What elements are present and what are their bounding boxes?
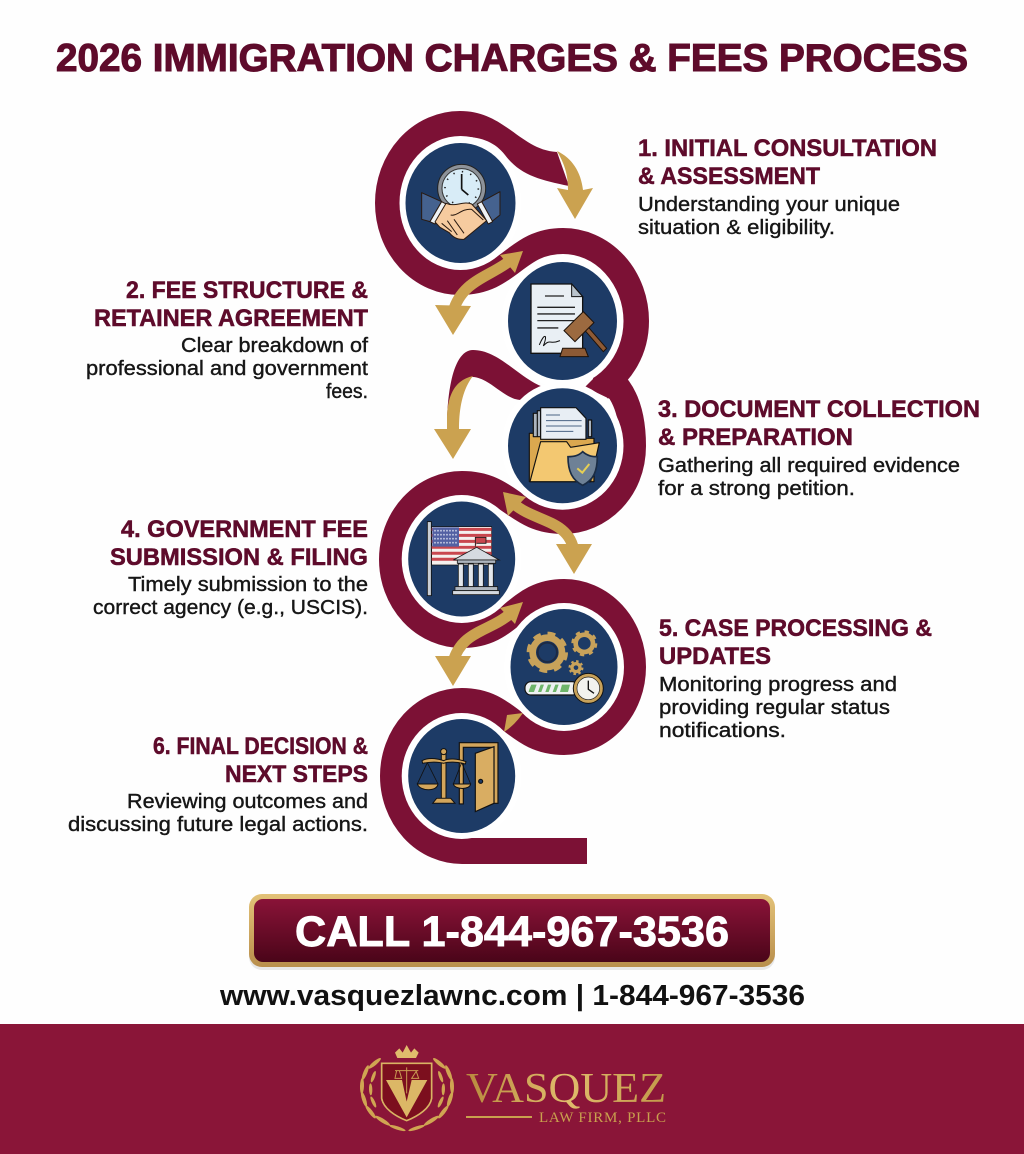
icon circle 1: handshake and clock (400, 136, 522, 270)
step 2 text: professional and government (86, 358, 368, 380)
website and phone: www.vasquezlawnc.com | 1-844-967-3536 (219, 980, 805, 1012)
step 6 text: discussing future legal actions. (68, 814, 368, 836)
progress clock (573, 673, 603, 703)
step 4 text: Timely submission to the (128, 574, 368, 596)
step 5 text: notifications. (659, 720, 786, 742)
step 5 text: providing regular status (659, 697, 890, 719)
arrow 2 shaft (453, 260, 511, 312)
arrow 5 shaft (453, 613, 511, 662)
handshake (422, 192, 500, 239)
folder (529, 408, 599, 482)
shield (382, 1063, 432, 1121)
scales (417, 749, 471, 803)
shield letter V (386, 1080, 427, 1117)
gears (531, 633, 595, 674)
step 6 text: NEXT STEPS (225, 761, 368, 788)
serpentine ribbon (388, 111, 636, 851)
check mark (577, 464, 589, 473)
arrow 5 heads (435, 602, 523, 686)
step 6 text: 6. FINAL DECISION & (153, 733, 368, 760)
step 1 text: & ASSESSMENT (638, 163, 820, 190)
step 6 text: Reviewing outcomes and (127, 791, 368, 813)
icon circle 3: folder and shield (502, 382, 624, 510)
step 1 text (638, 135, 937, 239)
step 3 text: 3. DOCUMENT COLLECTION (658, 396, 980, 423)
firm suffix: LAW FIRM, PLLC (539, 1110, 666, 1126)
footer band (0, 1024, 1024, 1154)
right laurel (408, 1057, 454, 1132)
flag (427, 522, 492, 596)
arrow 4 shaft (514, 504, 574, 552)
shield (568, 452, 597, 485)
step 1 text: situation & eligibility. (638, 217, 835, 239)
ribbon main path (388, 124, 636, 851)
scales on shield (395, 1067, 419, 1093)
step 1 text: Understanding your unique (638, 194, 900, 216)
step 6 text (68, 733, 368, 836)
step 2 text: RETAINER AGREEMENT (94, 305, 368, 332)
button label: CALL 1-844-967-3536 (295, 908, 729, 956)
arrow 6 (504, 713, 523, 732)
step 4 text: SUBMISSION & FILING (110, 544, 368, 571)
step 2 text: Clear breakdown of (181, 335, 368, 357)
arrow 2 (435, 251, 523, 335)
document (531, 284, 583, 353)
step 5 text: 5. CASE PROCESSING & (659, 615, 932, 642)
call button (249, 894, 775, 970)
crown (395, 1045, 419, 1058)
icon circle 5: gears and progress (504, 603, 624, 731)
icon circle 6: scales and door (402, 713, 522, 839)
arrow 2 heads (435, 251, 523, 335)
firm name: VASQUEZ (466, 1066, 666, 1112)
logo rule (466, 1116, 532, 1118)
step 5 text (659, 615, 932, 742)
step 4 text: correct agency (e.g., USCIS). (93, 597, 368, 619)
ribbon junction between steps 2 and 3 (585, 360, 626, 400)
gavel (560, 312, 607, 357)
step 3 text: for a strong petition. (658, 478, 855, 500)
ribbon tail toward arrow 1 (460, 111, 569, 186)
step 3 text: & PREPARATION (658, 424, 853, 451)
step 2 text: 2. FEE STRUCTURE & (126, 277, 368, 304)
arrow 3 (434, 376, 473, 459)
arrow 4 (503, 492, 592, 574)
step 3 text (658, 396, 980, 500)
step 3 text: Gathering all required evidence (658, 455, 960, 477)
progress bar (525, 682, 578, 695)
clock (438, 164, 486, 212)
step 4 text (93, 516, 368, 619)
step 2 text: fees. (326, 381, 368, 403)
step 5 text: UPDATES (659, 643, 771, 670)
title: 2026 IMMIGRATION CHARGES & FEES PROCESS (56, 37, 968, 80)
arrow 4 heads (503, 492, 592, 574)
icon circle 2: document and gavel (502, 255, 624, 387)
step 5 text: Monitoring progress and (659, 674, 897, 696)
arrow 5 (435, 602, 523, 686)
government building (453, 537, 499, 595)
step 1 text: 1. INITIAL CONSULTATION (638, 135, 937, 162)
ribbon tail toward arrow 3 (447, 350, 546, 420)
arrow 1 (557, 151, 593, 219)
left laurel (360, 1057, 406, 1132)
step 2 text (86, 277, 368, 403)
logo (360, 1045, 666, 1132)
door (459, 743, 498, 812)
icon circle 4: flag and government building (402, 495, 522, 623)
step 4 text: 4. GOVERNMENT FEE (121, 516, 368, 543)
